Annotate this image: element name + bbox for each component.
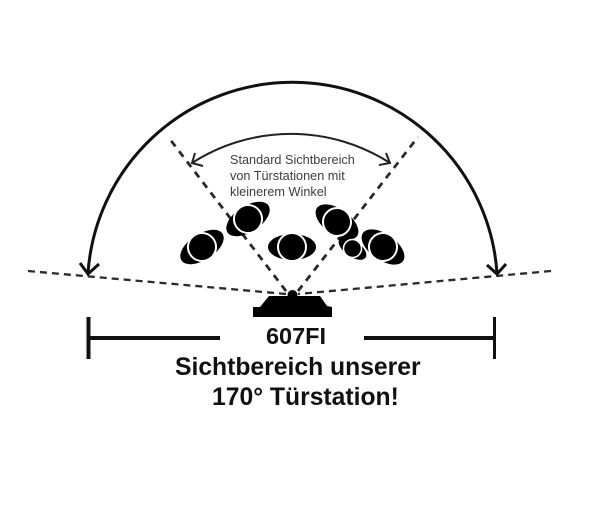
standard range caption: Standard Sichtbereich [230, 153, 355, 167]
narrow sight lines (standard angle) [169, 137, 418, 291]
person 5 [334, 232, 371, 265]
headline [175, 354, 421, 411]
large arc arrow: 170 degree range [80, 82, 506, 274]
standard range caption: kleinerem Winkel [230, 185, 327, 199]
headline: 170° Türstation! [212, 384, 399, 411]
person 3 [268, 233, 316, 261]
width bar right [364, 317, 495, 359]
width bar left [88, 317, 220, 359]
standard range caption: von Türstationen mit [230, 169, 345, 183]
standard range caption [230, 153, 355, 199]
headline: Sichtbereich unserer [175, 354, 421, 381]
person 6 [355, 221, 411, 273]
small arc arrow: standard range [192, 134, 390, 166]
person 1 [220, 194, 276, 244]
horizontal sight lines (170 degree limits) [28, 271, 551, 294]
person 4 [309, 196, 365, 248]
model label: 607FI [266, 323, 326, 349]
door station icon [253, 290, 332, 317]
person 2 [174, 222, 230, 272]
